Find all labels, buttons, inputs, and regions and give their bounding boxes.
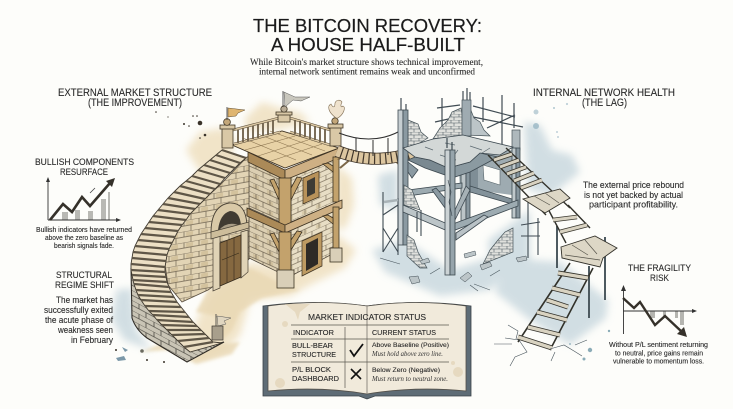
row: P/L block dashboard: P/L BLOCK xyxy=(292,365,331,374)
stair-foot post and flag xyxy=(212,314,231,340)
timber frame xyxy=(247,148,342,288)
upper ladder xyxy=(488,148,590,243)
page stains xyxy=(275,304,463,388)
heading: the fragility risk xyxy=(628,263,692,284)
curved stone tower wall xyxy=(165,157,250,302)
text: without P/L sentiment: Without P/L sentiment returning xyxy=(609,342,708,349)
front column xyxy=(445,138,455,275)
text: bullish indicators xyxy=(36,227,132,250)
broken floor slab xyxy=(403,135,513,177)
broken back walls xyxy=(408,100,520,150)
chart: falling fragility arrow xyxy=(621,285,697,337)
rickety ladder with platforms xyxy=(488,148,617,366)
row: P/L block dashboard xyxy=(292,365,448,383)
ground cracks xyxy=(494,325,587,366)
flag: centre tower xyxy=(283,91,310,107)
heading: structural regime shift xyxy=(55,270,114,291)
illustration: ruined concrete frame xyxy=(380,88,540,291)
rebar and scaffolding rods xyxy=(401,88,523,145)
heading: bullish components resurface: BULLISH COMPONENTS xyxy=(35,157,134,167)
row: bull-bear structure: Must hold above zero line. xyxy=(371,351,443,358)
heading: external market structure: EXTERNAL MARKET STRUCTURE xyxy=(58,87,212,99)
columns xyxy=(398,110,520,245)
title: THE BITCOIN RECOVERY: xyxy=(253,15,482,36)
heading: internal network health xyxy=(533,87,675,109)
text: market exited weakness: in February xyxy=(71,334,113,345)
table rules xyxy=(291,325,449,388)
house walls xyxy=(249,155,336,276)
title: A HOUSE HALF-BUILT xyxy=(271,34,465,55)
row: bull-bear structure: Above Baseline (Positive) xyxy=(372,342,449,349)
text: without P/L sentiment xyxy=(609,342,708,366)
heading: the fragility risk: THE FRAGILITY xyxy=(628,263,692,274)
text: market exited weakness: successfully exited xyxy=(44,304,113,315)
title xyxy=(253,15,482,55)
market indicator status book xyxy=(263,302,471,399)
text: without P/L sentiment: vulnerable to momentum loss. xyxy=(613,358,704,366)
text: market exited weakness: The market has xyxy=(56,294,113,305)
text: bullish indicators: Bullish indicators have returned xyxy=(36,227,132,234)
lower doorway xyxy=(302,232,322,276)
roof balustrade xyxy=(220,106,343,148)
heading: the fragility risk: RISK xyxy=(650,273,669,284)
column headers xyxy=(293,328,436,337)
row: bull-bear structure: BULL-BEAR xyxy=(292,341,333,350)
heading: structural regime shift: REGIME SHIFT xyxy=(55,280,114,291)
row: bull-bear structure xyxy=(292,341,449,359)
chart: rising bullish arrow xyxy=(46,177,121,222)
text: market exited weakness xyxy=(44,294,113,345)
text: market exited weakness: weakness seen xyxy=(57,324,113,335)
heading: bullish components resurface: RESURFACE xyxy=(60,167,108,177)
row: bull-bear structure: STRUCTURE xyxy=(292,350,336,359)
column headers: INDICATOR xyxy=(293,328,334,337)
row: P/L block dashboard: Must return to neutral zone. xyxy=(371,376,448,383)
roof deck xyxy=(232,131,339,168)
text: external price rebound: is not yet backed by actual xyxy=(584,190,683,200)
outer stair wall xyxy=(131,268,224,362)
book spine xyxy=(366,305,368,394)
heading: structural regime shift: STRUCTURAL xyxy=(56,270,113,281)
heading: external market structure: (THE IMPROVEMENT) xyxy=(88,97,182,109)
watercolor washes xyxy=(112,102,610,364)
rubble xyxy=(409,251,527,284)
text: market exited weakness: the acute phase of xyxy=(45,314,113,325)
flag: left tower xyxy=(227,107,245,120)
rope bridge xyxy=(337,131,414,170)
text: external price rebound: participant profitability. xyxy=(589,200,678,210)
subtitle: While Bitcoin's market structure shows technical improvement, xyxy=(250,58,483,68)
illustration: stone house with spiral stairs xyxy=(131,91,344,362)
book pages xyxy=(268,302,466,394)
text: without P/L sentiment: to neutral, price gains remain xyxy=(615,350,703,358)
text: external price rebound: The external price rebound xyxy=(583,180,684,190)
text: bullish indicators: above the zero baseline as xyxy=(45,235,124,242)
row: P/L block dashboard: Below Zero (Negative) xyxy=(372,367,440,374)
column headers: CURRENT STATUS xyxy=(372,328,436,337)
heading: internal network health: INTERNAL NETWORK HEALTH xyxy=(533,87,675,99)
lower back room xyxy=(458,150,512,195)
arched door in tower xyxy=(211,203,249,291)
text: external price rebound xyxy=(583,180,684,210)
book title: MARKET INDICATOR STATUS xyxy=(308,312,426,322)
subtitle: internal network sentiment remains weak and unconfirmed xyxy=(259,66,475,78)
text: bullish indicators: bearish signals fade. xyxy=(54,243,114,250)
spiral stairs xyxy=(131,150,246,352)
heading: external market structure xyxy=(58,87,212,109)
lower ladder xyxy=(518,236,617,350)
book cover xyxy=(263,302,471,399)
cross beams xyxy=(403,162,518,240)
crumbled brick walls xyxy=(404,185,513,268)
upper window xyxy=(303,171,319,204)
row: P/L block dashboard: DASHBOARD xyxy=(292,374,339,383)
platform support posts xyxy=(557,226,605,318)
subtitle xyxy=(250,58,483,78)
heading: internal network health: (THE LAG) xyxy=(582,97,627,109)
stone finial ornament xyxy=(329,100,344,118)
heading: bullish components resurface xyxy=(35,157,134,177)
side scaffolding xyxy=(383,192,540,258)
